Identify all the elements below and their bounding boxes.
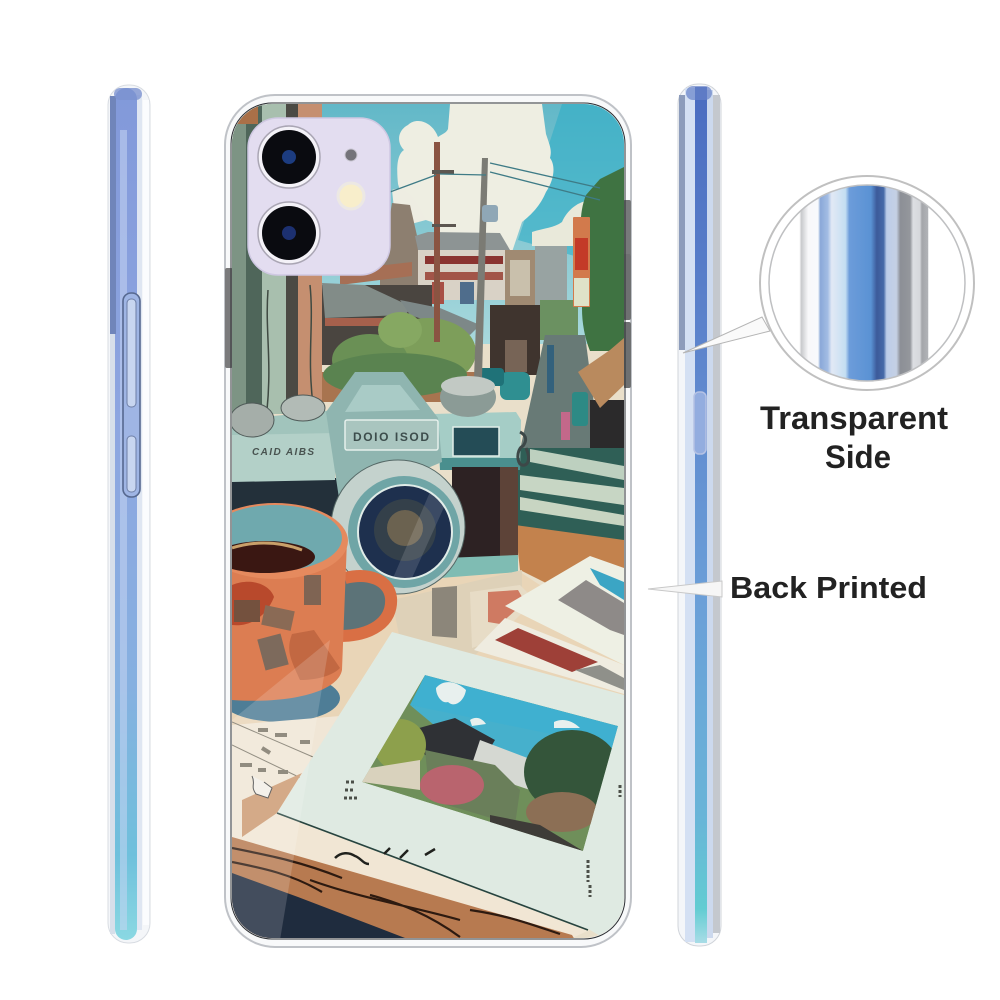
- camera: [230, 372, 528, 594]
- far street buildings: [490, 246, 578, 375]
- right plate and dark body: [432, 412, 521, 578]
- camera brand text: DOIO ISOD: [353, 430, 429, 444]
- tan envelope: [242, 773, 302, 838]
- cream paper edge: [232, 813, 590, 938]
- right tree: [577, 167, 624, 351]
- label: back printed: Back Printed: [730, 570, 927, 605]
- label: transparent: Transparent: [760, 400, 948, 436]
- camera module: [248, 118, 390, 275]
- callout: back printed: [648, 570, 927, 605]
- callout pointer: [648, 581, 722, 597]
- wood table: [518, 525, 624, 582]
- coffee mug: [232, 503, 398, 722]
- letter on left: [232, 716, 338, 838]
- stacked photos right: [474, 556, 624, 694]
- grey roof and lower building: [322, 283, 480, 365]
- right dial: [440, 376, 496, 417]
- camera strap: [518, 432, 528, 465]
- case side buttons: [225, 200, 631, 388]
- papers under camera: [395, 570, 528, 654]
- utility poles and wires: [390, 142, 600, 378]
- mug rim and coffee: [232, 503, 348, 579]
- side button outline: [123, 293, 140, 497]
- bottom lens: [258, 202, 320, 264]
- magnified side stripes: [769, 185, 965, 381]
- prism: [326, 372, 442, 505]
- cream marks on paper edge: [335, 848, 435, 864]
- callout: transparent side: [683, 176, 974, 475]
- callout pointer: [683, 317, 770, 353]
- table surface: [232, 572, 624, 730]
- printed artwork: [200, 104, 624, 950]
- sky and clouds: [232, 104, 624, 344]
- large print mat: [277, 632, 624, 950]
- street cars and people: [478, 340, 588, 440]
- camera model text: CAID AIBS: [252, 447, 314, 458]
- camera body plate: [232, 433, 335, 482]
- label: side: Side: [825, 439, 891, 475]
- saucer: [232, 685, 340, 722]
- inner photo: [362, 675, 620, 851]
- left phone side view: [108, 85, 150, 943]
- mug handle: [339, 576, 391, 636]
- wood table edge: [232, 837, 575, 940]
- street trees: [322, 312, 477, 402]
- left house: [380, 203, 418, 290]
- case outline: [225, 95, 631, 947]
- microphone: [345, 149, 357, 161]
- mat shadow line: [277, 813, 588, 930]
- camera lens: [331, 460, 465, 594]
- right awning: [578, 338, 624, 450]
- flash: [338, 183, 364, 209]
- phone back case: [200, 95, 631, 950]
- wooden window frame left: [232, 104, 322, 414]
- top lens: [258, 126, 320, 188]
- glass sheen: [232, 640, 330, 940]
- mug shading and stickers: [232, 575, 340, 680]
- inner case line: [231, 103, 625, 939]
- mat handwriting marks: [344, 782, 620, 897]
- right phone side view: [678, 84, 721, 946]
- shop sign: [573, 217, 590, 307]
- magnifier inner ring: [769, 185, 965, 381]
- red front building: [415, 232, 510, 304]
- street road: [521, 335, 594, 448]
- name plate: [345, 420, 438, 450]
- magnifier circle: [760, 176, 974, 390]
- window sill right: [518, 448, 624, 540]
- left dials: [230, 395, 325, 437]
- mug body: [232, 547, 347, 701]
